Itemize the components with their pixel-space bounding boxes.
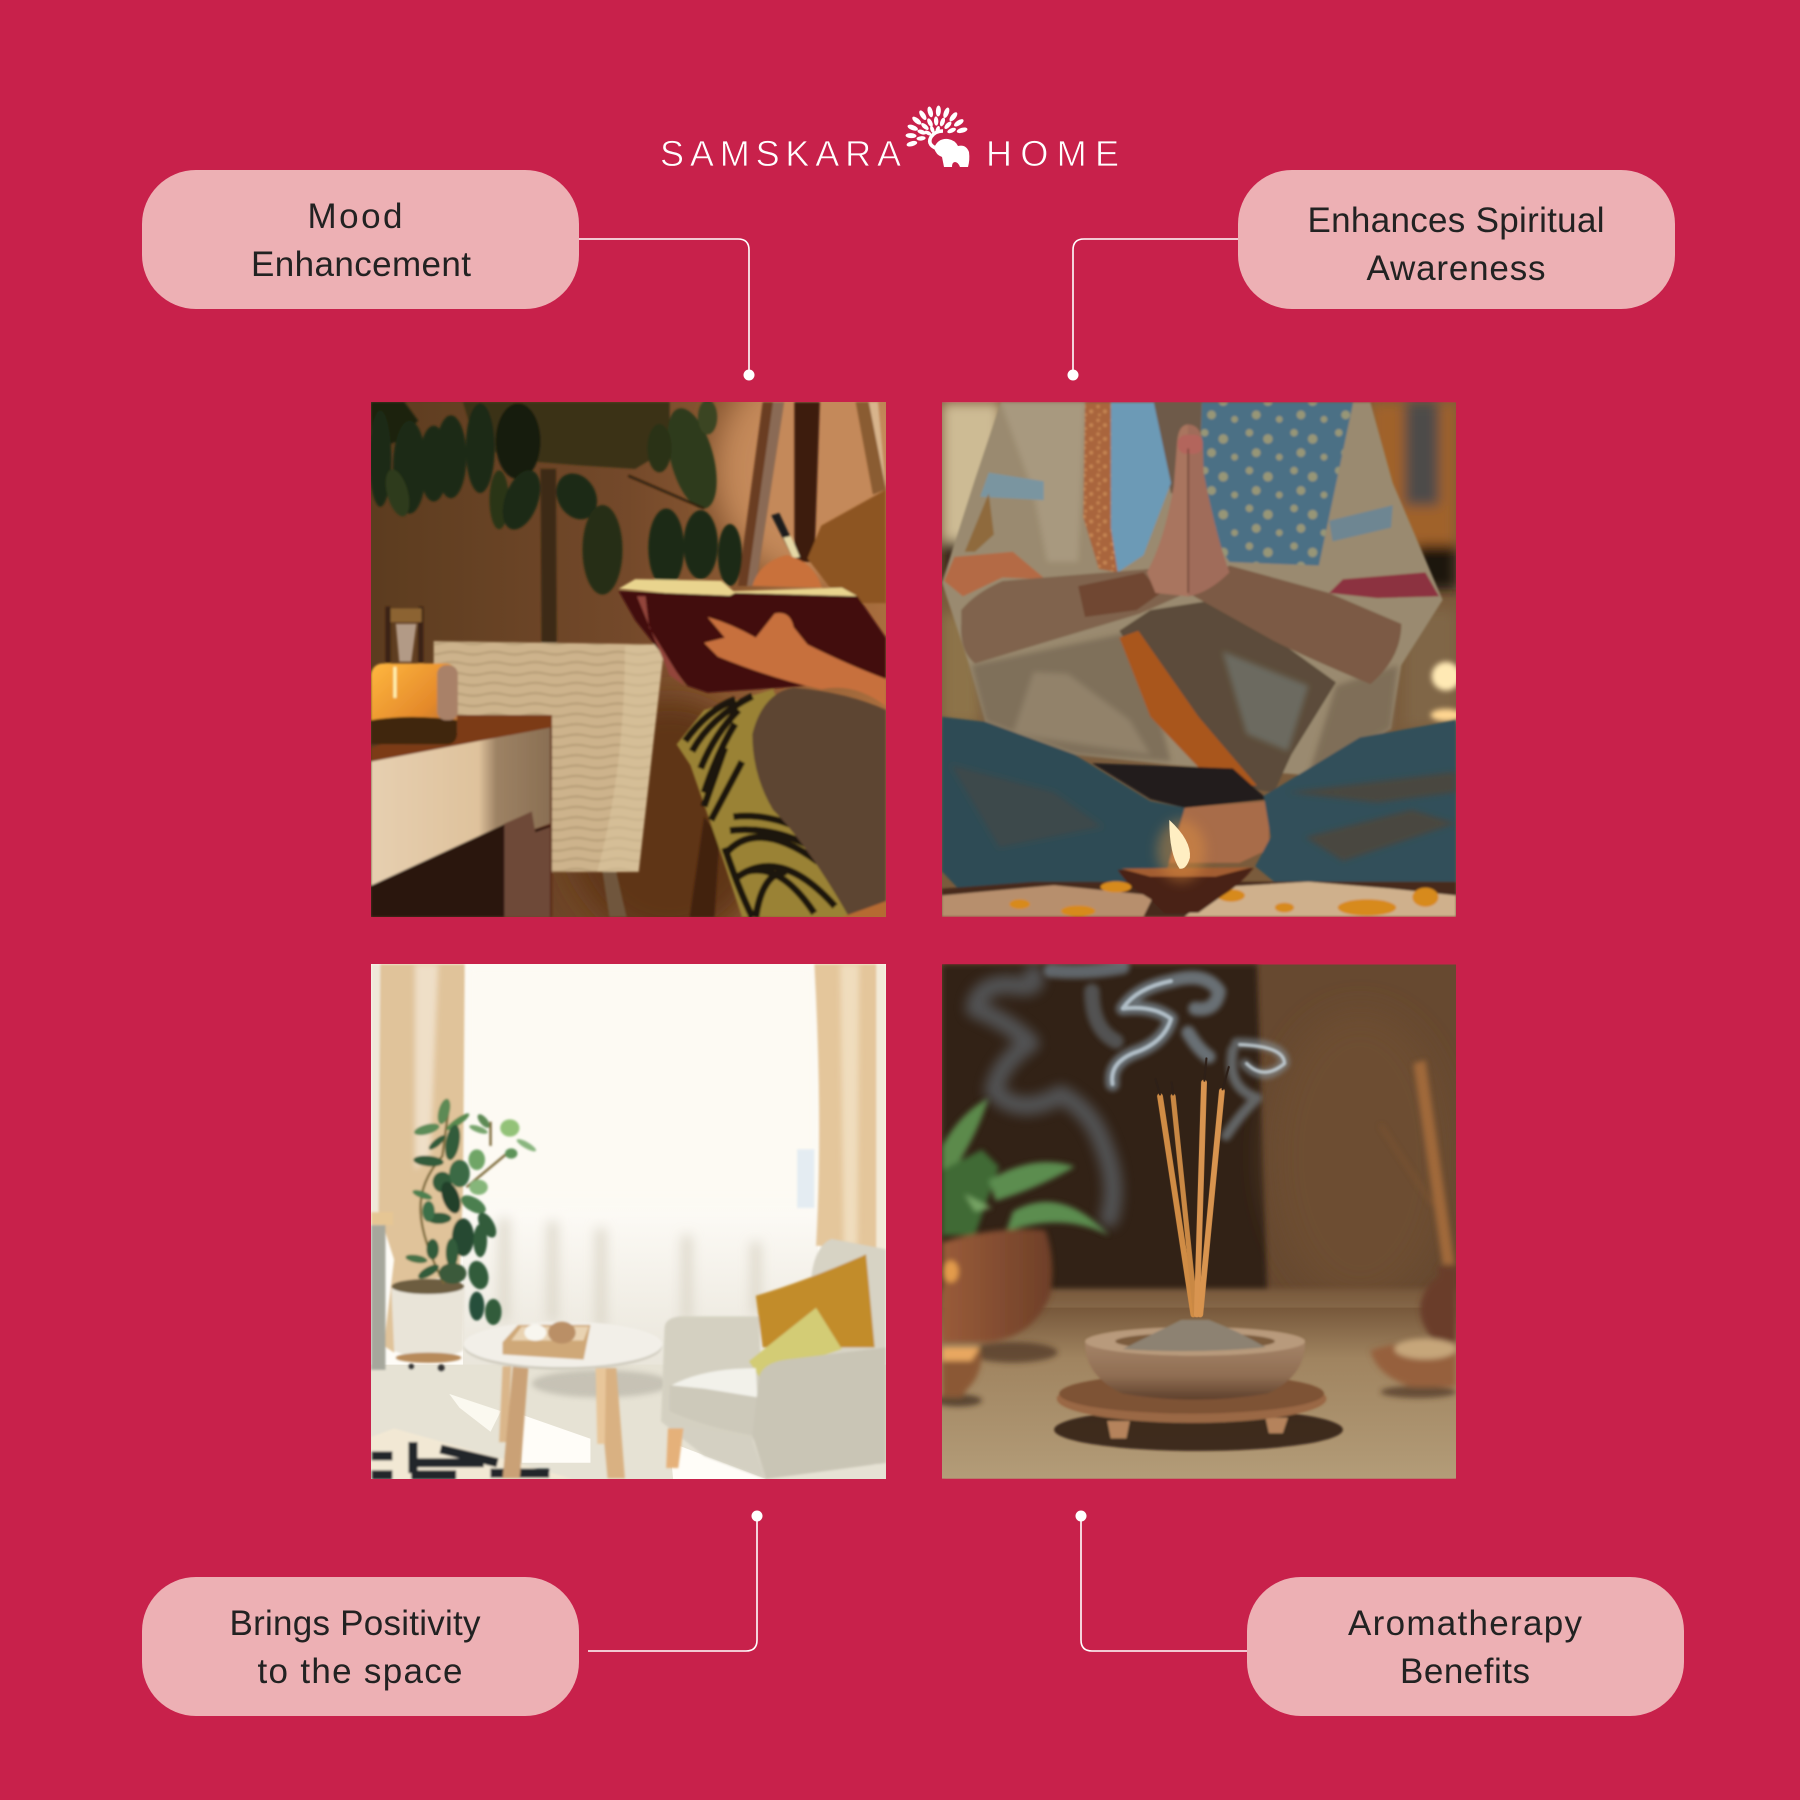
logo: Samskara Home (660, 105, 1119, 174)
right vase and plate (1420, 1266, 1456, 1342)
table (371, 715, 552, 917)
pill: Mood Enhancement: Mood (308, 197, 402, 236)
panel: Aromatherapy Benefits callout (1076, 1510, 1684, 1716)
person sleeve (807, 489, 886, 603)
connector: Mood Enhancement to photo (579, 239, 754, 380)
hands (752, 555, 822, 588)
blurred plant and pot (934, 1060, 1456, 1407)
pill: Brings Positivity to the space (142, 1577, 579, 1716)
logo wordmark left: SAMSKARA (660, 133, 901, 174)
pill: Brings Positivity to the space: Brings Positivity (230, 1604, 481, 1643)
plant stems (421, 1105, 508, 1284)
blue scarf (1111, 402, 1171, 572)
diya (1118, 868, 1253, 913)
table legs (597, 1368, 625, 1478)
table (464, 1323, 662, 1370)
logo wordmark right: HOME (986, 133, 1119, 174)
smoke (975, 967, 1284, 1218)
connector: Brings Positivity to photo (588, 1510, 762, 1651)
photo: incense sticks with rising smoke in a ceramic bowl (942, 964, 1456, 1479)
logo icon: elephant with leaf tree (905, 105, 969, 167)
panel: Mood Enhancement callout (142, 170, 754, 380)
pill: Aromatherapy Benefits (1247, 1577, 1684, 1716)
pill: Aromatherapy Benefits: Benefits (1400, 1652, 1530, 1691)
photo: bright living room with plant, round table and armchair (371, 964, 886, 1479)
hands (1188, 425, 1229, 596)
sleeve bands (944, 552, 1045, 596)
arms (961, 569, 1186, 663)
pill: Brings Positivity to the space: to the space (258, 1652, 462, 1691)
candle (371, 663, 457, 744)
foot (1169, 801, 1269, 863)
pill: Mood Enhancement (142, 170, 579, 309)
photo: person in sari with hands in namaste and a diya (942, 402, 1456, 917)
photo: person writing in a journal beside a candle and plant (371, 402, 886, 917)
hourglass (385, 607, 423, 663)
pill: Enhances Spiritual Awareness: Enhances Spiritual (1308, 201, 1604, 240)
pot (391, 1281, 465, 1359)
floor (942, 882, 1456, 916)
armchair (811, 1239, 886, 1363)
pill: Aromatherapy Benefits: Aromatherapy (1348, 1604, 1582, 1643)
knee and zebra leg (677, 689, 876, 917)
pill: Mood Enhancement: Enhancement (251, 245, 471, 284)
rug (371, 1428, 573, 1479)
incense sticks (1156, 1058, 1229, 1315)
connector: Spiritual Awareness to photo (1068, 239, 1238, 380)
trousers (942, 717, 1185, 896)
orange stripe (1083, 402, 1118, 572)
pill: Enhances Spiritual Awareness: Awareness (1366, 249, 1546, 288)
panel: Brings Positivity callout (142, 1510, 762, 1716)
floor (371, 1365, 886, 1479)
pill: Enhances Spiritual Awareness (1238, 170, 1675, 309)
shirt (942, 402, 1443, 775)
neck (1150, 402, 1202, 493)
pen (771, 513, 800, 558)
book (619, 579, 857, 600)
connector: Aromatherapy to photo (1076, 1510, 1247, 1651)
bowl and stand (1054, 1320, 1343, 1451)
lower scarf (1119, 600, 1336, 792)
panel: Enhances Spiritual Awareness callout (1068, 170, 1675, 380)
